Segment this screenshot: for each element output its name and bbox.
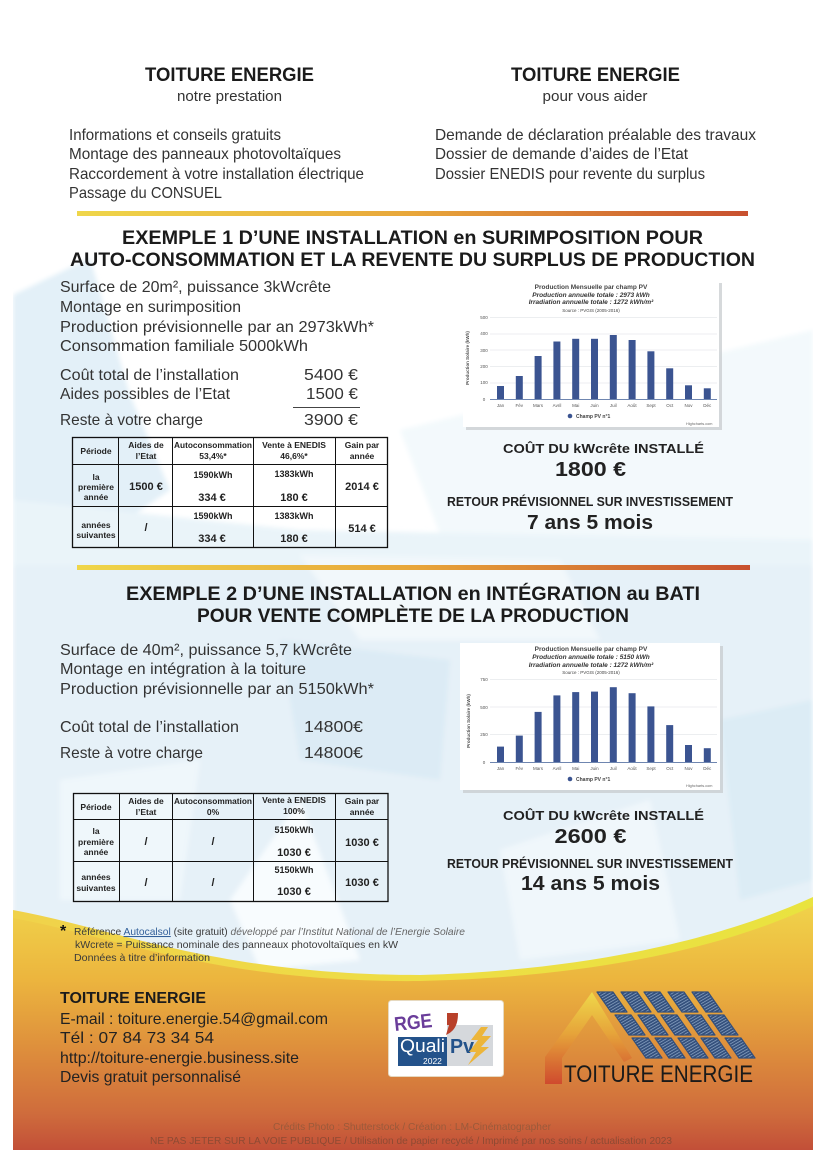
table: exemple 1: Période xyxy=(80,446,112,456)
table: exemple 2: 5150kWh xyxy=(274,825,314,835)
table: exemple 1: / xyxy=(144,522,148,534)
badge: RGE QualiPV 2022: Quali xyxy=(400,1036,445,1056)
value: 14 ans 5 mois: 14 ans 5 mois xyxy=(521,873,660,895)
footnotes: Référence Autocalsol (site gratuit) développé par l’Institut National de l’Energie Solaire xyxy=(74,926,465,938)
logo wordmark: TOITURE ENERGIE xyxy=(564,1061,753,1088)
text block: exemple 2 caractéristiques: Surface de 40m², puissance 5,7 kWcrête xyxy=(60,642,352,659)
credits: Crédits Photo : Shutterstock / Création : LM-Cinématographer xyxy=(273,1121,551,1133)
list: aide items: Demande de déclaration préalable des travaux xyxy=(435,127,756,144)
chart titles: Irradiation annuelle totale : 1272 kWh/m² xyxy=(529,662,654,669)
contact block: Devis gratuit personnalisé xyxy=(60,1069,241,1086)
table: exemple 1 xyxy=(72,437,388,548)
month labels: Sept xyxy=(646,403,656,408)
chart titles: Production annuelle totale : 5150 kWh xyxy=(532,654,650,661)
credits: NE PAS JETER SUR LA VOIE PUBLIQUE / Utilisation de papier recyclé / Imprimé par nos soins / actualisation 2023 xyxy=(150,1135,672,1147)
table: exemple 2: 1030 € xyxy=(345,877,379,889)
month labels: Sept xyxy=(646,766,656,771)
value: 7 ans 5 mois: 7 ans 5 mois xyxy=(527,512,653,534)
table: exemple 1: 1590kWh xyxy=(193,511,233,521)
table: exemple 2: 1030 € xyxy=(345,837,379,849)
kpi: retour sur investissement: RETOUR PRÉVISIONNEL SUR INVESTISSEMENT xyxy=(447,856,733,871)
table: exemple 2: / xyxy=(211,836,215,848)
month labels: Mai xyxy=(572,766,579,771)
chart titles: Source : PVGIS (2005-2016) xyxy=(562,670,620,675)
table: exemple 1: Aides de xyxy=(128,440,164,450)
badge: RGE QualiPV 2022 xyxy=(388,1000,504,1076)
text block: exemple 2 caractéristiques: Montage en intégration à la toiture xyxy=(60,661,306,678)
table: exemple 1: première xyxy=(78,482,114,492)
subheading: pour vous aider: pour vous aider xyxy=(542,89,648,105)
text block: exemple 2 coûts: 14800€ xyxy=(304,719,363,736)
legend: Champ PV n°1 xyxy=(576,414,610,420)
table: exemple 1: 180 € xyxy=(280,533,308,545)
table: exemple 2: première xyxy=(78,837,114,847)
table: exemple 2: Autoconsommation xyxy=(174,796,252,806)
badge: RGE QualiPV 2022: 2022 xyxy=(423,1056,442,1066)
bars xyxy=(497,335,711,399)
table: exemple 2: l’Etat xyxy=(136,807,157,817)
y axis labels xyxy=(465,315,488,402)
text block: exemple 2 coûts: Reste à votre charge xyxy=(60,745,203,762)
month labels: Déc xyxy=(703,403,712,408)
month labels xyxy=(497,766,712,771)
divider rule 1 xyxy=(77,211,748,216)
background pattern xyxy=(0,225,826,1005)
month labels: Avril xyxy=(553,766,561,771)
y axis labels xyxy=(466,677,488,765)
y axis labels: 300 xyxy=(480,348,488,353)
heading: exemple 1: AUTO-CONSOMMATION ET LA REVENTE DU SURPLUS DE PRODUCTION xyxy=(70,250,755,271)
footnotes: * xyxy=(60,923,67,940)
month labels: Jan xyxy=(497,766,505,771)
table: exemple 2: 1030 € xyxy=(277,886,311,898)
table: exemple 2: 1030 € xyxy=(277,847,311,859)
table: exemple 2: suivantes xyxy=(76,883,116,893)
table: exemple 2: / xyxy=(211,877,215,889)
chart: production mensuelle exemple 2: Highcharts.com xyxy=(686,784,712,788)
chart titles xyxy=(529,646,654,675)
table: exemple 1: la xyxy=(92,472,100,482)
text block: exemple 1 caractéristiques: Montage en surimposition xyxy=(60,299,241,316)
table: exemple 1: Vente à ENEDIS xyxy=(262,440,326,450)
table: exemple 2: Gain par xyxy=(345,796,380,806)
table: exemple 2: / xyxy=(144,836,148,848)
chart titles xyxy=(529,284,654,313)
y axis labels: 100 xyxy=(480,380,488,385)
y axis labels: 750 xyxy=(480,677,488,682)
footnotes: kWcrete = Puissance nominale des panneaux photovoltaïques en kW xyxy=(75,939,398,951)
table: exemple 1: 1383kWh xyxy=(274,469,314,479)
chart: production mensuelle exemple 2 xyxy=(460,643,723,793)
value: 1800 euros: 1800 € xyxy=(555,459,626,481)
month labels: Juin xyxy=(590,403,599,408)
text block: exemple 1 coûts: 5400 € xyxy=(304,367,358,384)
footer swoosh band xyxy=(13,897,813,1150)
logo: toiture energie xyxy=(545,992,755,1088)
subheading: notre prestation: notre prestation xyxy=(177,89,282,105)
table: exemple 1: 53,4%* xyxy=(199,451,227,461)
contact block: http://toiture-energie.business.site xyxy=(60,1050,299,1067)
text block: exemple 1 coûts: Coût total de l’installation xyxy=(60,367,239,384)
month labels: Mars xyxy=(533,403,544,408)
table: exemple 1: 2014 € xyxy=(345,481,379,493)
table: exemple 2: 0% xyxy=(207,807,220,817)
y axis labels: 0 xyxy=(483,397,486,402)
list: aide items: Dossier de demande d’aides de l’Etat xyxy=(435,146,689,163)
list: aide items xyxy=(435,127,756,183)
month labels: Oct xyxy=(666,766,674,771)
month labels xyxy=(497,403,712,408)
table: exemple 1: suivantes xyxy=(76,530,116,540)
heading: exemple 1 xyxy=(70,228,755,271)
list: prestation items: Passage du CONSUEL xyxy=(69,185,222,202)
list: prestation items: Informations et conseils gratuits xyxy=(69,127,281,144)
table: exemple 1: 514 € xyxy=(348,523,376,535)
y axis labels: Production Solaire (kWh) xyxy=(465,331,470,385)
table: exemple 2: Aides de xyxy=(128,796,164,806)
table: exemple 2: années xyxy=(81,872,111,882)
left column: notre prestation xyxy=(69,65,364,202)
chart titles: Source : PVGIS (2005-2016) xyxy=(562,308,620,313)
table: exemple 1: 334 € xyxy=(198,492,226,504)
table: exemple 2: 100% xyxy=(283,806,305,816)
y axis labels: 0 xyxy=(483,760,486,765)
value: 2600 euros: 2600 € xyxy=(554,826,626,848)
month labels: Août xyxy=(627,403,637,408)
table: exemple 1: Gain par xyxy=(345,440,380,450)
table: exemple 1: 1500 € xyxy=(129,481,163,493)
text block: exemple 1 coûts xyxy=(60,367,360,429)
list: prestation items: Raccordement à votre installation électrique xyxy=(69,166,364,183)
chart titles: Production Mensuelle par champ PV xyxy=(535,646,648,653)
heading: exemple 1: EXEMPLE 1 D’UNE INSTALLATION en SURIMPOSITION POUR xyxy=(122,228,703,249)
text block: exemple 1 caractéristiques: Production prévisionnelle par an 2973kWh* xyxy=(60,319,374,336)
text block: exemple 2 coûts: 14800€ xyxy=(304,745,363,762)
right column: pour vous aider xyxy=(435,65,756,183)
text block: exemple 2 caractéristiques: Production prévisionnelle par an 5150kWh* xyxy=(60,681,374,698)
contact block: E-mail : toiture.energie.54@gmail.com xyxy=(60,1011,328,1028)
table: exemple 2 xyxy=(73,793,388,902)
y axis labels: 250 xyxy=(480,732,488,737)
text block: exemple 1 coûts: Reste à votre charge xyxy=(60,412,203,429)
month labels: Août xyxy=(627,766,637,771)
text block: exemple 1 caractéristiques xyxy=(60,279,374,355)
table: exemple 1: Autoconsommation xyxy=(174,440,252,450)
logo solar panels xyxy=(597,992,755,1058)
text block: exemple 2 coûts: Coût total de l’installation xyxy=(60,719,239,736)
text block: exemple 1 caractéristiques: Consommation familiale 5000kWh xyxy=(60,338,308,355)
text block: exemple 2 caractéristiques xyxy=(60,642,374,698)
table: exemple 2: Vente à ENEDIS xyxy=(262,795,326,805)
kpi: coût du kWcrête: COÛT DU kWcrête INSTALLÉ xyxy=(503,808,704,823)
month labels: Fév xyxy=(516,403,524,408)
table: exemple 1: années xyxy=(81,520,111,530)
table: exemple 2: 5150kWh xyxy=(274,865,314,875)
y axis labels: 400 xyxy=(480,331,488,336)
contact heading: TOITURE ENERGIE xyxy=(60,990,206,1007)
month labels: Jan xyxy=(497,403,505,408)
kpi block: exemple 2 xyxy=(447,808,733,895)
chart: production mensuelle exemple 1 xyxy=(463,280,722,430)
y axis labels: 500 xyxy=(480,705,488,710)
table: exemple 1: 334 € xyxy=(198,533,226,545)
text block: exemple 1 coûts: 1500 € xyxy=(306,386,358,403)
y axis labels: 200 xyxy=(480,364,488,369)
footnotes xyxy=(60,923,465,964)
contact block xyxy=(60,990,328,1086)
list: aide items: Dossier ENEDIS pour revente du surplus xyxy=(435,166,705,183)
month labels: Oct xyxy=(666,403,674,408)
month labels: Fév xyxy=(516,766,524,771)
table: exemple 1: année xyxy=(350,451,375,461)
month labels: Mai xyxy=(572,403,579,408)
table: exemple 2: Période xyxy=(80,802,112,812)
footnotes: Données à titre d’information xyxy=(74,952,210,964)
heading: toiture energie prestation: TOITURE ENERGIE xyxy=(145,65,314,86)
list: prestation items: Montage des panneaux photovoltaïques xyxy=(69,146,341,163)
table: exemple 1: l’Etat xyxy=(136,451,157,461)
y axis labels: 500 xyxy=(480,315,488,320)
heading: toiture energie aide: TOITURE ENERGIE xyxy=(511,65,680,86)
chart: production mensuelle exemple 1: Highcharts.com xyxy=(686,422,712,426)
month labels: Déc xyxy=(703,766,712,771)
list: prestation items xyxy=(69,127,364,202)
text block: exemple 1 coûts: Aides possibles de l’Etat xyxy=(60,386,231,403)
month labels: Juil xyxy=(610,403,617,408)
table: exemple 1: 1383kWh xyxy=(274,511,314,521)
month labels: Nov xyxy=(684,766,693,771)
logo roof xyxy=(545,992,632,1084)
text block: exemple 1 caractéristiques: Surface de 20m², puissance 3kWcrête xyxy=(60,279,331,296)
kpi: coût du kWcrête: COÛT DU kWcrête INSTALLÉ xyxy=(503,441,704,456)
text block: exemple 1 coûts: 3900 € xyxy=(304,412,358,429)
text block: exemple 2 coûts xyxy=(60,719,363,762)
bars xyxy=(497,687,711,762)
month labels: Juil xyxy=(610,766,617,771)
heading: exemple 2: EXEMPLE 2 D’UNE INSTALLATION en INTÉGRATION au BATI xyxy=(126,583,700,605)
kpi: retour sur investissement: RETOUR PRÉVISIONNEL SUR INVESTISSEMENT xyxy=(447,494,733,509)
chart titles: Production Mensuelle par champ PV xyxy=(535,284,648,291)
chart titles: Irradiation annuelle totale : 1272 kWh/m² xyxy=(529,299,654,306)
chart titles: Production annuelle totale : 2973 kWh xyxy=(532,292,650,299)
month labels: Avril xyxy=(553,403,561,408)
y axis labels: Production Solaire (kWh) xyxy=(466,694,471,748)
table: exemple 2: la xyxy=(92,826,100,836)
divider rule 2 xyxy=(77,565,750,570)
badge: RGE QualiPV 2022: Pv xyxy=(450,1036,475,1058)
table: exemple 1: 46,6%* xyxy=(280,451,308,461)
table: exemple 1: 180 € xyxy=(280,492,308,504)
month labels: Juin xyxy=(590,766,599,771)
month labels: Nov xyxy=(684,403,693,408)
kpi block: exemple 1 xyxy=(447,441,733,534)
heading: exemple 2 xyxy=(126,583,700,627)
legend: Champ PV n°1 xyxy=(576,777,610,783)
credits xyxy=(150,1121,672,1147)
contact block: Tél : 07 84 73 34 54 xyxy=(60,1030,214,1047)
table: exemple 2: année xyxy=(350,807,375,817)
badge: RGE QualiPV 2022: RGE xyxy=(393,1010,433,1036)
table: exemple 1: 1590kWh xyxy=(193,470,233,480)
table: exemple 1: année xyxy=(84,492,109,502)
table: exemple 2: / xyxy=(144,877,148,889)
table: exemple 2: année xyxy=(84,847,109,857)
heading: exemple 2: POUR VENTE COMPLÈTE DE LA PRODUCTION xyxy=(197,605,629,627)
month labels: Mars xyxy=(533,766,544,771)
